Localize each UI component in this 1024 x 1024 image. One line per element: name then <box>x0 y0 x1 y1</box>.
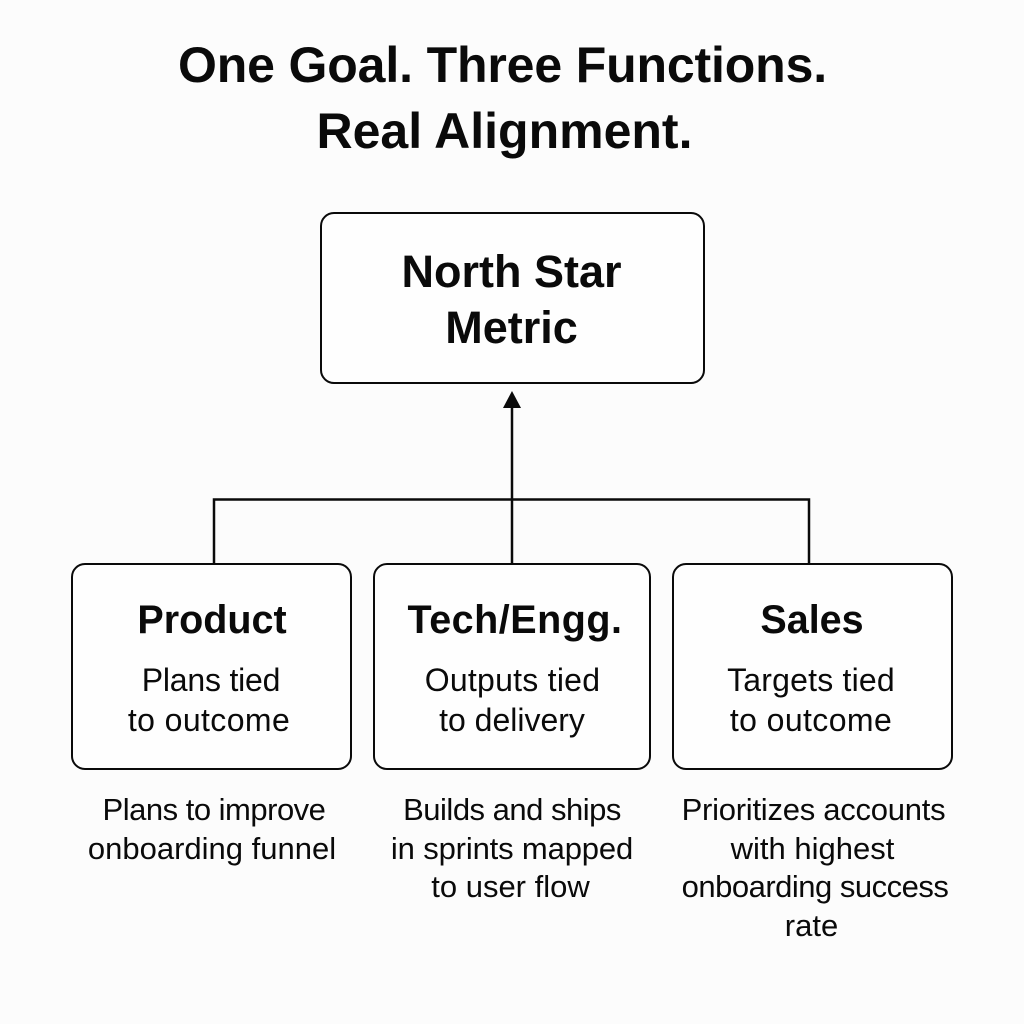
title: Real Alignment. <box>316 103 692 159</box>
product description <box>88 792 336 866</box>
sales text: Targets tied <box>727 662 895 698</box>
sales text: to outcome <box>730 702 892 738</box>
panel: sales <box>672 563 953 770</box>
tech text: to delivery <box>439 702 585 738</box>
title <box>178 37 827 159</box>
sales heading: Sales <box>760 598 864 642</box>
sales description: with highest <box>731 831 894 866</box>
north star heading: Metric <box>445 302 578 353</box>
product description: Plans to improve <box>103 792 325 827</box>
tech description: to user flow <box>431 869 590 904</box>
tech text: Outputs tied <box>425 662 600 698</box>
tech text <box>425 662 600 738</box>
panel: tech/engg <box>373 563 651 770</box>
sales text <box>727 662 895 738</box>
product text: to outcome <box>128 702 290 738</box>
sales description: rate <box>785 908 838 943</box>
product text: Plans tied <box>142 662 280 698</box>
sales description: onboarding success <box>682 869 948 904</box>
tech description: Builds and ships <box>403 792 621 827</box>
tech description: in sprints mapped <box>391 831 633 866</box>
product text <box>128 662 290 738</box>
product heading: Product <box>137 598 287 642</box>
title: One Goal. Three Functions. <box>178 37 827 93</box>
panel: product <box>71 563 352 770</box>
tech heading: Tech/Engg. <box>408 598 622 642</box>
tech description <box>391 792 633 904</box>
north star heading <box>401 246 622 353</box>
sales description <box>682 792 948 943</box>
sales description: Prioritizes accounts <box>682 792 945 827</box>
product description: onboarding funnel <box>88 831 336 866</box>
north star heading: North Star <box>401 246 622 297</box>
panel: north star metric <box>320 212 705 384</box>
